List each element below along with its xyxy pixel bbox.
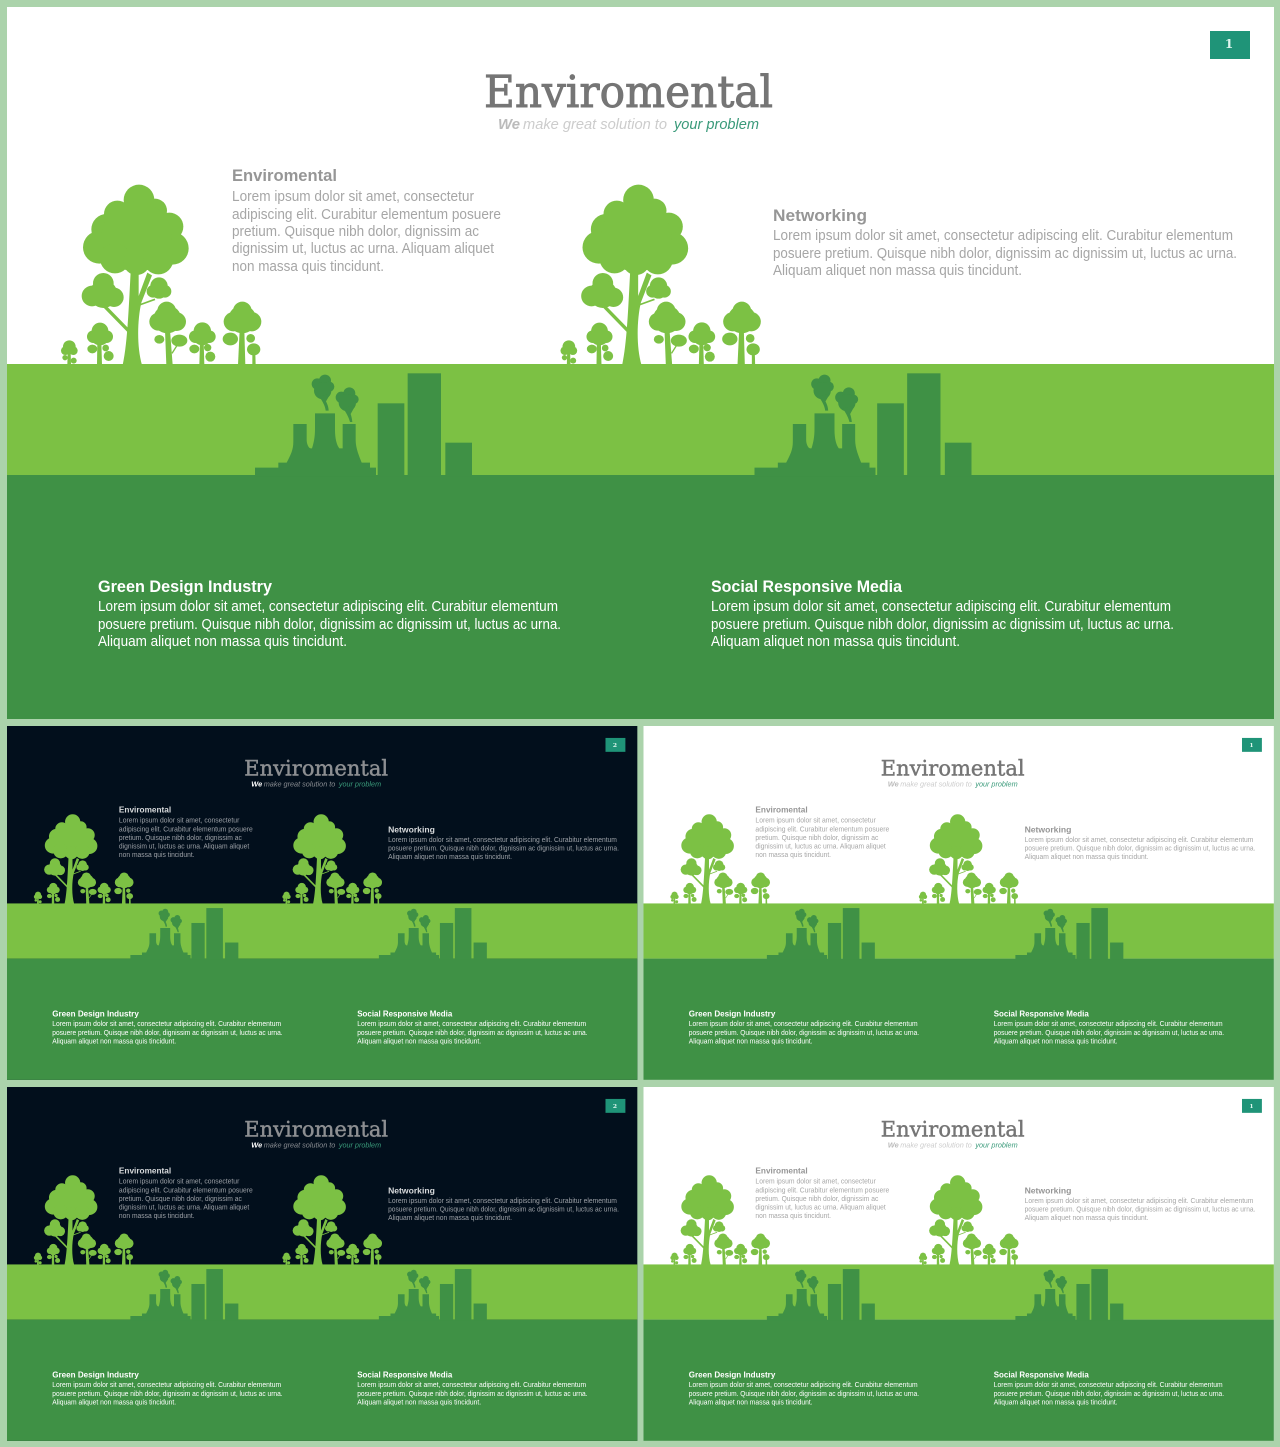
slide background (644, 1087, 1274, 1441)
page number badge (605, 1099, 625, 1113)
page number badge (1242, 738, 1262, 752)
text block: Enviromental: Enviromental (119, 1165, 171, 1175)
text block: Enviromental: Enviromental (232, 166, 337, 185)
text block: Enviromental: adipiscing elit. Curabitur elementum posuere (119, 824, 253, 833)
title: Enviromental (881, 1118, 1025, 1143)
text block: Networking: Lorem ipsum dolor sit amet, consectetur adipiscing elit. Curabitur elementum (1025, 1196, 1253, 1205)
text block: Networking: posuere pretium. Quisque nibh dolor, dignissim ac dignissim ut, luctus ac urna. (388, 1205, 619, 1214)
text block: Green Design Industry (689, 1370, 919, 1407)
illustration: trees, factories and green bands (7, 814, 637, 1080)
text block: Networking: Networking (388, 1185, 435, 1195)
text block: Green Design Industry: Aliquam aliquet non massa quis tincidunt. (689, 1037, 813, 1046)
text block: Networking: Lorem ipsum dolor sit amet, consectetur adipiscing elit. Curabitur elementum (1025, 835, 1253, 844)
subtitle: make great solution to (264, 780, 335, 789)
text block: Enviromental (755, 1165, 889, 1220)
subtitle: We (251, 1141, 262, 1150)
text block: Enviromental: Lorem ipsum dolor sit amet, consectetur (119, 1176, 240, 1185)
text block: Social Responsive Media (357, 1370, 588, 1407)
subtitle: your problem (338, 1141, 381, 1150)
text block: Enviromental: Lorem ipsum dolor sit amet, consectetur (119, 815, 240, 824)
text block: Social Responsive Media: Social Responsive Media (994, 1370, 1089, 1380)
page number badge: 1 (1249, 742, 1254, 749)
text block: Enviromental: Enviromental (119, 804, 171, 814)
text block: Networking (1025, 824, 1255, 861)
text block: Social Responsive Media: posuere pretium. Quisque nibh dolor, dignissim ac dignissim ut, luctus ac urna. (711, 617, 1174, 633)
subtitle: your problem (974, 780, 1018, 789)
text block: Social Responsive Media: Aliquam aliquet non massa quis tincidunt. (357, 1037, 481, 1046)
subtitle (251, 780, 381, 789)
subtitle (888, 780, 1018, 789)
text block: Green Design Industry (52, 1009, 283, 1046)
text block: Green Design Industry: Aliquam aliquet non massa quis tincidunt. (689, 1398, 813, 1407)
text block: Enviromental: non massa quis tincidunt. (755, 850, 831, 859)
text block: Social Responsive Media: posuere pretium. Quisque nibh dolor, dignissim ac dignissim ut, luctus ac urna. (994, 1028, 1224, 1037)
text block: Enviromental: non massa quis tincidunt. (232, 259, 384, 275)
text block: Enviromental (119, 804, 253, 859)
text block: Networking: Aliquam aliquet non massa quis tincidunt. (1025, 852, 1148, 861)
text block: Green Design Industry: Aliquam aliquet non massa quis tincidunt. (52, 1037, 176, 1046)
text block: Green Design Industry (52, 1370, 283, 1407)
text block: Networking: posuere pretium. Quisque nibh dolor, dignissim ac dignissim ut, luctus ac urna. (773, 246, 1237, 262)
text block: Networking: posuere pretium. Quisque nibh dolor, dignissim ac dignissim ut, luctus ac urna. (388, 844, 619, 853)
text block: Enviromental: Lorem ipsum dolor sit amet, consectetur (755, 1176, 876, 1185)
text block: Networking: Lorem ipsum dolor sit amet, consectetur adipiscing elit. Curabitur elementum (388, 835, 617, 844)
subtitle: your problem (673, 116, 759, 133)
subtitle (251, 1141, 381, 1150)
text block: Enviromental: dignissim ut, luctus ac urna. Aliquam aliquet (119, 1202, 249, 1211)
text block: Social Responsive Media: Social Responsive Media (357, 1009, 453, 1019)
text block: Social Responsive Media: posuere pretium. Quisque nibh dolor, dignissim ac dignissim ut, luctus ac urna. (357, 1389, 588, 1398)
text block: Green Design Industry: Aliquam aliquet non massa quis tincidunt. (52, 1398, 176, 1407)
subtitle (888, 1141, 1018, 1150)
text block: Green Design Industry: Lorem ipsum dolor sit amet, consectetur adipiscing elit. Curabitur elementum (98, 599, 558, 615)
text block: Networking: posuere pretium. Quisque nibh dolor, dignissim ac dignissim ut, luctus ac urna. (1025, 844, 1255, 853)
subtitle: your problem (974, 1141, 1018, 1150)
page number badge (1210, 31, 1250, 59)
text block: Social Responsive Media: Aliquam aliquet non massa quis tincidunt. (994, 1037, 1118, 1046)
text block: Networking: Aliquam aliquet non massa quis tincidunt. (388, 1213, 512, 1222)
text block: Social Responsive Media: Lorem ipsum dolor sit amet, consectetur adipiscing elit. Curabitur elementum (994, 1380, 1223, 1389)
illustration: trees, factories and green bands (644, 814, 1274, 1080)
subtitle: your problem (338, 780, 381, 789)
subtitle (498, 116, 759, 133)
text block: Green Design Industry: Lorem ipsum dolor sit amet, consectetur adipiscing elit. Curabitur elementum (52, 1019, 281, 1028)
text block: Enviromental: adipiscing elit. Curabitur elementum posuere (119, 1185, 253, 1194)
text block: Social Responsive Media: Aliquam aliquet non massa quis tincidunt. (357, 1398, 481, 1407)
title: Enviromental (244, 757, 388, 782)
text block: Social Responsive Media (711, 577, 1174, 650)
slide background (644, 726, 1274, 1080)
text block: Green Design Industry: Aliquam aliquet non massa quis tincidunt. (98, 634, 347, 650)
page number badge: 2 (613, 1103, 617, 1110)
text block: Networking (1025, 1185, 1255, 1222)
page number badge: 1 (1225, 37, 1233, 51)
text block: Social Responsive Media: Lorem ipsum dolor sit amet, consectetur adipiscing elit. Curabitur elementum (357, 1380, 586, 1389)
text block: Networking: Networking (388, 824, 435, 834)
text block: Networking: Aliquam aliquet non massa quis tincidunt. (388, 852, 512, 861)
title: Enviromental (244, 1118, 388, 1143)
subtitle: We (498, 116, 520, 133)
text block: Networking: Lorem ipsum dolor sit amet, consectetur adipiscing elit. Curabitur elementum (773, 228, 1233, 244)
page number badge (605, 738, 625, 752)
text block: Green Design Industry: posuere pretium. Quisque nibh dolor, dignissim ac dignissim ut, luctus ac urna. (52, 1389, 283, 1398)
text block: Green Design Industry: Lorem ipsum dolor sit amet, consectetur adipiscing elit. Curabitur elementum (689, 1380, 918, 1389)
text block: Green Design Industry: Green Design Industry (52, 1009, 139, 1019)
text block: Social Responsive Media (994, 1009, 1224, 1046)
text block: Enviromental: dignissim ut, luctus ac urna. Aliquam aliquet (232, 241, 494, 257)
panel: light thumbnail slide, row 2 (644, 1087, 1274, 1441)
panel: light thumbnail slide, row 1 (644, 726, 1274, 1080)
text block: Green Design Industry: Green Design Industry (689, 1009, 776, 1019)
text block: Enviromental: dignissim ut, luctus ac urna. Aliquam aliquet (119, 841, 249, 850)
text block: Enviromental: pretium. Quisque nibh dolor, dignissim ac (119, 833, 242, 842)
text block: Social Responsive Media: posuere pretium. Quisque nibh dolor, dignissim ac dignissim ut, luctus ac urna. (357, 1028, 588, 1037)
text block: Enviromental: pretium. Quisque nibh dolor, dignissim ac (119, 1194, 242, 1203)
panel: dark thumbnail slide, row 1 (7, 726, 637, 1080)
text block: Networking: Networking (1025, 824, 1071, 834)
text block: Social Responsive Media: Social Responsive Media (357, 1370, 453, 1380)
text block: Green Design Industry: Green Design Industry (689, 1370, 776, 1380)
text block: Enviromental: adipiscing elit. Curabitur elementum posuere (755, 824, 889, 833)
text block: Green Design Industry: posuere pretium. Quisque nibh dolor, dignissim ac dignissim ut, luctus ac urna. (52, 1028, 283, 1037)
text block: Enviromental: Enviromental (755, 1165, 808, 1175)
text block: Social Responsive Media: Social Responsive Media (994, 1009, 1089, 1019)
text block: Enviromental: pretium. Quisque nibh dolor, dignissim ac (755, 833, 879, 842)
text block: Green Design Industry: Green Design Industry (52, 1370, 139, 1380)
text block: Enviromental (232, 166, 501, 275)
text block: Green Design Industry: Lorem ipsum dolor sit amet, consectetur adipiscing elit. Curabitur elementum (52, 1380, 281, 1389)
text block: Enviromental: non massa quis tincidunt. (755, 1211, 831, 1220)
text block: Enviromental: Enviromental (755, 804, 808, 814)
subtitle: We (888, 780, 899, 789)
text block: Social Responsive Media: Lorem ipsum dolor sit amet, consectetur adipiscing elit. Curabitur elementum (357, 1019, 586, 1028)
text block: Networking: Networking (773, 206, 867, 225)
text block: Social Responsive Media: Social Responsive Media (711, 577, 903, 596)
text block: Green Design Industry: posuere pretium. Quisque nibh dolor, dignissim ac dignissim ut, luctus ac urna. (98, 617, 561, 633)
text block: Networking: Aliquam aliquet non massa quis tincidunt. (1025, 1213, 1148, 1222)
text block: Social Responsive Media (357, 1009, 588, 1046)
text block: Networking (388, 1185, 619, 1222)
subtitle: We (251, 780, 262, 789)
text block: Enviromental: Lorem ipsum dolor sit amet, consectetur (755, 815, 876, 824)
text block: Enviromental: pretium. Quisque nibh dolor, dignissim ac (755, 1194, 879, 1203)
text block: Green Design Industry: posuere pretium. Quisque nibh dolor, dignissim ac dignissim ut, luctus ac urna. (689, 1389, 919, 1398)
text block: Social Responsive Media: posuere pretium. Quisque nibh dolor, dignissim ac dignissim ut, luctus ac urna. (994, 1389, 1224, 1398)
text block: Social Responsive Media: Aliquam aliquet non massa quis tincidunt. (994, 1398, 1118, 1407)
text block: Green Design Industry: Lorem ipsum dolor sit amet, consectetur adipiscing elit. Curabitur elementum (689, 1019, 918, 1028)
text block: Networking (388, 824, 619, 861)
text block: Enviromental: dignissim ut, luctus ac urna. Aliquam aliquet (755, 1202, 886, 1211)
illustration: trees, factories and green bands (7, 185, 1274, 719)
text block: Social Responsive Media: Lorem ipsum dolor sit amet, consectetur adipiscing elit. Curabitur elementum (711, 599, 1171, 615)
text block: Enviromental: adipiscing elit. Curabitur elementum posuere (232, 207, 501, 223)
text block: Networking: Aliquam aliquet non massa quis tincidunt. (773, 263, 1022, 279)
text block: Green Design Industry (98, 577, 561, 650)
illustration: trees, factories and green bands (7, 1175, 637, 1441)
text block: Social Responsive Media (994, 1370, 1224, 1407)
title: Enviromental (484, 67, 773, 118)
text block: Enviromental (755, 804, 889, 859)
text block: Social Responsive Media: Aliquam aliquet non massa quis tincidunt. (711, 634, 960, 650)
text block: Enviromental (119, 1165, 253, 1220)
title: Enviromental (881, 757, 1025, 782)
text block: Enviromental: dignissim ut, luctus ac urna. Aliquam aliquet (755, 841, 886, 850)
subtitle: We (888, 1141, 899, 1150)
panel: main light slide (7, 7, 1274, 719)
text block: Enviromental: adipiscing elit. Curabitur elementum posuere (755, 1185, 889, 1194)
slide background (7, 1087, 637, 1441)
text block: Networking: posuere pretium. Quisque nibh dolor, dignissim ac dignissim ut, luctus ac urna. (1025, 1205, 1255, 1214)
subtitle: make great solution to (264, 1141, 335, 1150)
panel: dark thumbnail slide, row 2 (7, 1087, 637, 1441)
text block: Green Design Industry: posuere pretium. Quisque nibh dolor, dignissim ac dignissim ut, luctus ac urna. (689, 1028, 919, 1037)
text block: Enviromental: non massa quis tincidunt. (119, 1211, 195, 1220)
text block: Networking (773, 206, 1237, 279)
subtitle: make great solution to (523, 116, 667, 133)
text block: Enviromental: pretium. Quisque nibh dolor, dignissim ac (232, 224, 479, 240)
text block: Enviromental: non massa quis tincidunt. (119, 850, 195, 859)
subtitle: make great solution to (900, 780, 972, 789)
text block: Green Design Industry (689, 1009, 919, 1046)
illustration: trees, factories and green bands (644, 1175, 1274, 1441)
slide background (7, 7, 1274, 719)
text block: Enviromental: Lorem ipsum dolor sit amet, consectetur (232, 189, 474, 205)
text block: Networking: Lorem ipsum dolor sit amet, consectetur adipiscing elit. Curabitur elementum (388, 1196, 617, 1205)
page number badge: 1 (1249, 1103, 1254, 1110)
subtitle: make great solution to (900, 1141, 972, 1150)
page number badge: 2 (613, 742, 617, 749)
page number badge (1242, 1099, 1262, 1113)
text block: Networking: Networking (1025, 1185, 1071, 1195)
text block: Green Design Industry: Green Design Industry (98, 577, 273, 596)
text block: Social Responsive Media: Lorem ipsum dolor sit amet, consectetur adipiscing elit. Curabitur elementum (994, 1019, 1223, 1028)
slide background (7, 726, 637, 1080)
